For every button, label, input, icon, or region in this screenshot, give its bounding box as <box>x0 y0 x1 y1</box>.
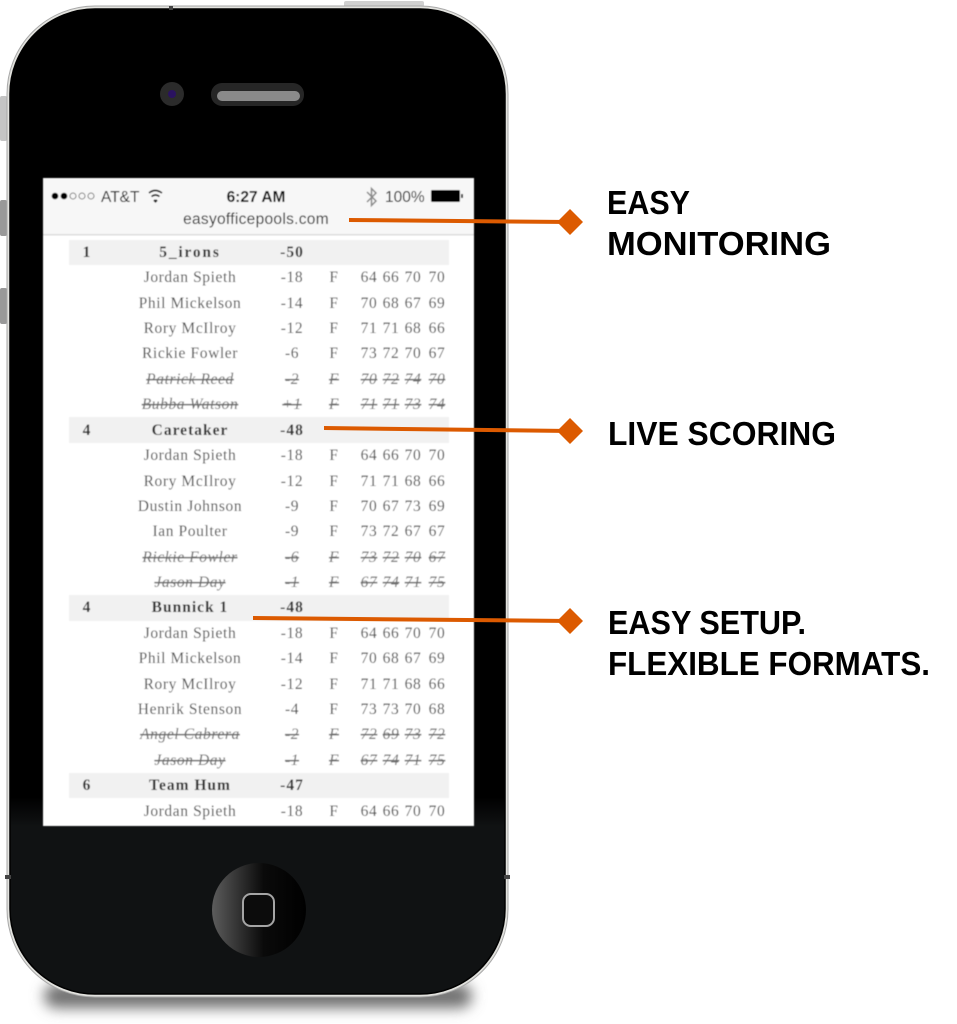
team: Bunnick 1: -14 <box>281 650 303 667</box>
team: Caretaker: Jordan Spieth <box>144 447 236 464</box>
team: Bunnick 1: Phil Mickelson <box>139 650 241 667</box>
team: 5_irons: Rickie Fowler <box>142 345 238 362</box>
label: easy monitoring: MONITORING <box>607 225 831 262</box>
team: 5_irons: F <box>329 295 339 312</box>
team: 5_irons: Phil Mickelson <box>139 295 241 312</box>
team: 5_irons: 68 <box>405 320 421 337</box>
phone shadow <box>44 984 472 1008</box>
team: Caretaker: 67 <box>405 523 421 540</box>
team: 5_irons: 66 <box>429 320 445 337</box>
team: Caretaker: Caretaker <box>152 422 228 439</box>
team: 5_irons: 70 <box>405 269 421 286</box>
team: Bunnick 1: Jordan Spieth <box>144 625 236 642</box>
team: 5_irons: 71 <box>383 320 399 337</box>
team: 5_irons: F <box>329 320 339 337</box>
team: Caretaker: 71 <box>405 574 421 591</box>
team: Caretaker: 71 <box>383 473 399 490</box>
team: Bunnick 1: 66 <box>429 676 445 693</box>
team: Bunnick 1: F <box>329 701 339 718</box>
team: Caretaker: 66 <box>429 473 445 490</box>
team: Caretaker: -48 <box>280 422 304 439</box>
team: Bunnick 1: 71 <box>405 752 421 769</box>
team: 5_irons: 67 <box>405 295 421 312</box>
team: Caretaker: Ian Poulter <box>152 523 228 540</box>
team: Caretaker: -9 <box>285 523 299 540</box>
team: Bunnick 1: 70 <box>429 625 445 642</box>
team: Bunnick 1: 73 <box>361 701 377 718</box>
team: Bunnick 1: -48 <box>280 599 304 616</box>
team: Bunnick 1: 66 <box>383 625 399 642</box>
team: 5_irons: 66 <box>383 269 399 286</box>
team: Caretaker: 70 <box>405 549 421 566</box>
team: Caretaker: 74 <box>383 574 399 591</box>
team: Team Hum: -47 <box>280 777 304 794</box>
team: 5_irons: 73 <box>405 396 421 413</box>
team: Bunnick 1: 70 <box>361 650 377 667</box>
team: 5_irons: 70 <box>429 269 445 286</box>
team: Bunnick 1: 64 <box>361 625 377 642</box>
team: Bunnick 1: F <box>329 625 339 642</box>
phone body <box>7 6 508 997</box>
team: Caretaker: 73 <box>405 498 421 515</box>
team: Caretaker: F <box>328 574 339 591</box>
team: Caretaker: -9 <box>285 498 299 515</box>
team: Team Hum <box>69 773 449 820</box>
team: Bunnick 1: 69 <box>383 726 399 743</box>
team: 5_irons: 69 <box>429 295 445 312</box>
label: live scoring: LIVE SCORING <box>608 415 836 452</box>
team: Caretaker: Dustin Johnson <box>138 498 242 515</box>
team: 5_irons: F <box>329 269 339 286</box>
bluetooth icon <box>367 188 376 206</box>
team: Bunnick 1 <box>69 595 449 769</box>
team: 5_irons: 64 <box>361 269 377 286</box>
team: Caretaker: -18 <box>281 447 303 464</box>
team: Bunnick 1: -4 <box>285 701 299 718</box>
team: Bunnick 1: F <box>329 676 339 693</box>
team: Bunnick 1: 75 <box>429 752 445 769</box>
team: Bunnick 1: 74 <box>383 752 399 769</box>
team: 5_irons: Patrick Reed <box>145 371 234 388</box>
team: 5_irons: Jordan Spieth <box>144 269 236 286</box>
team: Team Hum: F <box>329 803 339 820</box>
team: 5_irons: 67 <box>429 345 445 362</box>
team: Bunnick 1: Jason Day <box>154 752 226 769</box>
phone screen <box>43 178 474 826</box>
team: 5_irons: 73 <box>361 345 377 362</box>
team: Bunnick 1: Bunnick 1 <box>152 599 228 616</box>
team: Caretaker: -1 <box>285 574 299 591</box>
label: easy setup, flexible formats: EASY SETUP. <box>608 604 806 641</box>
team: Caretaker: Rory McIlroy <box>144 473 236 490</box>
team: 5_irons: -6 <box>285 345 299 362</box>
team: Bunnick 1: 69 <box>429 650 445 667</box>
team: Bunnick 1: Angel Cabrera <box>139 726 240 743</box>
team: Team Hum: 70 <box>405 803 421 820</box>
team: 5_irons: 5_irons <box>159 244 221 261</box>
callout arrow: easy setup <box>253 608 583 634</box>
team: 5_irons: -2 <box>285 371 299 388</box>
team: Caretaker: Rickie Fowler <box>141 549 238 566</box>
team: Team Hum: 66 <box>383 803 399 820</box>
site url: easyofficepools.com <box>183 211 329 228</box>
label: easy monitoring: EASY <box>607 184 690 221</box>
team: Bunnick 1: 68 <box>383 650 399 667</box>
team: Bunnick 1: F <box>328 752 339 769</box>
team: Caretaker: 69 <box>429 498 445 515</box>
team: 5_irons: 70 <box>405 345 421 362</box>
team: Caretaker: 73 <box>361 549 377 566</box>
team: Caretaker: 73 <box>361 523 377 540</box>
team: Caretaker: 70 <box>361 498 377 515</box>
team: Bunnick 1: 72 <box>361 726 377 743</box>
team: Caretaker: 72 <box>383 523 399 540</box>
team: 5_irons <box>69 240 449 413</box>
team: Bunnick 1: -12 <box>281 676 303 693</box>
team: 5_irons: +1 <box>282 396 302 413</box>
label: easy setup, flexible formats: FLEXIBLE FORMATS. <box>608 645 930 682</box>
team: 5_irons: Rory McIlroy <box>144 320 236 337</box>
team: 5_irons: 72 <box>383 345 399 362</box>
team: Bunnick 1: 67 <box>405 650 421 667</box>
team: Caretaker: 71 <box>361 473 377 490</box>
team: 5_irons: 70 <box>429 371 445 388</box>
team: Bunnick 1: 4 <box>83 599 91 616</box>
team: Caretaker: 72 <box>383 549 399 566</box>
callout arrow: easy monitoring <box>349 209 583 235</box>
team: Bunnick 1: Rory McIlroy <box>144 676 236 693</box>
team: Caretaker: 70 <box>429 447 445 464</box>
team: Bunnick 1: 73 <box>383 701 399 718</box>
team: Bunnick 1: 68 <box>429 701 445 718</box>
team: Caretaker: F <box>329 447 339 464</box>
team: 5_irons: 1 <box>83 244 91 261</box>
team: Caretaker: 70 <box>405 447 421 464</box>
wifi icon <box>149 190 162 202</box>
team: Team Hum: 70 <box>429 803 445 820</box>
battery icon <box>431 190 463 202</box>
team: Team Hum: Team Hum <box>149 777 231 794</box>
team: 5_irons: Bubba Watson <box>142 396 238 413</box>
team: Bunnick 1: 73 <box>405 726 421 743</box>
team: Team Hum: -18 <box>281 803 303 820</box>
team: Bunnick 1: F <box>328 726 339 743</box>
team: Caretaker: 67 <box>383 498 399 515</box>
callout arrow: live scoring <box>324 418 583 444</box>
team: Caretaker: 67 <box>429 549 446 566</box>
team: 5_irons: F <box>329 345 339 362</box>
team: Caretaker: -12 <box>281 473 303 490</box>
team: Bunnick 1: 67 <box>361 752 378 769</box>
team: 5_irons: 70 <box>361 295 377 312</box>
team: Bunnick 1: 70 <box>405 701 421 718</box>
team: Bunnick 1: F <box>329 650 339 667</box>
team: Bunnick 1: 70 <box>405 625 421 642</box>
signal dots <box>52 193 94 199</box>
team: Caretaker: 75 <box>429 574 445 591</box>
team: Caretaker: F <box>328 549 339 566</box>
team: Team Hum: Jordan Spieth <box>144 803 236 820</box>
home button <box>212 863 306 957</box>
team: Bunnick 1: -1 <box>285 752 299 769</box>
browser status bar <box>43 178 474 236</box>
team: Bunnick 1: Henrik Stenson <box>138 701 242 718</box>
team: Caretaker: 64 <box>361 447 377 464</box>
team: Caretaker <box>69 417 449 591</box>
time: 6:27 AM <box>227 189 285 206</box>
team: 5_irons: -18 <box>281 269 303 286</box>
team: 5_irons: -12 <box>281 320 303 337</box>
team: Bunnick 1: -18 <box>281 625 303 642</box>
team: 5_irons: F <box>328 396 339 413</box>
team: Caretaker: 68 <box>405 473 421 490</box>
team: Bunnick 1: 72 <box>429 726 445 743</box>
team: Team Hum: 6 <box>83 777 91 794</box>
team: 5_irons: 71 <box>361 396 377 413</box>
team: 5_irons: 70 <box>361 371 377 388</box>
side buttons <box>0 1 424 324</box>
team: Bunnick 1: 71 <box>383 676 399 693</box>
team: Bunnick 1: 68 <box>405 676 421 693</box>
team: Caretaker: F <box>329 498 339 515</box>
carrier: AT&T <box>101 189 140 206</box>
battery percent: 100% <box>385 189 425 206</box>
team: 5_irons: -50 <box>280 244 304 261</box>
team: Caretaker: F <box>329 523 339 540</box>
camera <box>160 82 184 106</box>
team: Bunnick 1: -2 <box>285 726 299 743</box>
speaker <box>211 83 304 106</box>
team: Caretaker: 66 <box>383 447 399 464</box>
team: Bunnick 1: 71 <box>361 676 377 693</box>
team: 5_irons: -14 <box>281 295 303 312</box>
team: Team Hum: 64 <box>361 803 377 820</box>
team: 5_irons: 74 <box>429 396 445 413</box>
team: Caretaker: 67 <box>429 523 445 540</box>
phone <box>0 1 510 1008</box>
team: Caretaker: -6 <box>285 549 299 566</box>
team: 5_irons: 74 <box>405 371 421 388</box>
team: Caretaker: 67 <box>361 574 378 591</box>
team: Caretaker: Jason Day <box>154 574 226 591</box>
team: 5_irons: 68 <box>383 295 399 312</box>
team: 5_irons: 72 <box>383 371 399 388</box>
team: Caretaker: F <box>329 473 339 490</box>
team: Caretaker: 4 <box>83 422 91 439</box>
team: 5_irons: F <box>328 371 339 388</box>
team: 5_irons: 71 <box>383 396 399 413</box>
team: 5_irons: 71 <box>361 320 377 337</box>
